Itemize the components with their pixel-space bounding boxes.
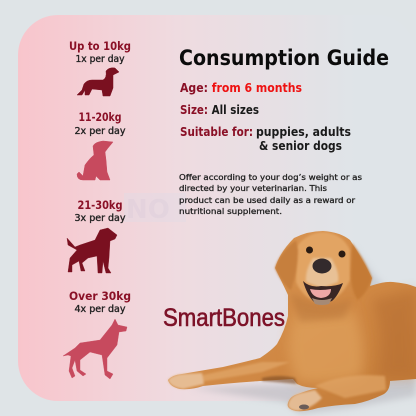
suitable for: & senior dogs — [259, 138, 342, 153]
photo: golden retriever — [168, 231, 416, 414]
dog nose — [312, 258, 332, 274]
icon: sitting dog — [77, 141, 113, 180]
dog neck shadow — [290, 292, 352, 322]
tier: 21-30kg: 21-30kg — [78, 199, 122, 212]
title: Consumption Guide — [179, 46, 389, 70]
dog front paw — [168, 373, 204, 389]
logo: SmartBones: SmartBones — [163, 304, 285, 332]
dog rear paw — [288, 390, 322, 411]
size line: Size: All sizes — [180, 102, 259, 117]
tier: up to 10kg — [69, 40, 131, 65]
tier: 11-20kg — [74, 111, 126, 137]
tier: up to 10kg: 1x per day — [76, 54, 125, 65]
tier: 21-30kg: 3x per day — [74, 213, 126, 224]
dog head — [296, 232, 350, 304]
age line: Age: from 6 months — [180, 80, 302, 95]
dog belly shadow — [262, 376, 297, 384]
dog chest light fur — [288, 308, 364, 383]
dog shadow — [190, 378, 416, 414]
description text: Offer according to your dog’s weight or as — [179, 172, 362, 182]
dog eyes — [306, 246, 313, 254]
watermark: NO — [126, 195, 170, 225]
dog claws — [299, 404, 309, 410]
tier: 11-20kg: 11-20kg — [78, 111, 122, 124]
watermark — [124, 193, 186, 225]
tier: over 30kg: 4x per day — [74, 304, 126, 315]
dog tongue — [310, 289, 331, 298]
dog flank shading — [372, 290, 416, 378]
description text — [179, 172, 362, 216]
dog ears — [275, 240, 298, 290]
description text: product can be used daily as a reward or — [179, 195, 356, 205]
dog body — [168, 231, 416, 411]
tier: 21-30kg — [74, 199, 126, 224]
tier: over 30kg — [69, 290, 131, 315]
icon: labrador — [67, 228, 117, 273]
icon: great dane — [63, 319, 127, 379]
dog leg highlight — [190, 362, 290, 382]
dog lower jaw — [312, 298, 332, 305]
panel: weight guide column — [63, 40, 131, 379]
description text: directed by your veterinarian. This — [179, 183, 327, 193]
icon: dachshund — [77, 68, 119, 96]
description text: nutritional supplement. — [179, 206, 282, 216]
dog muzzle — [306, 258, 338, 288]
tier: up to 10kg: Up to 10kg — [69, 40, 131, 53]
suitable for: puppies, adults — [256, 124, 351, 139]
tier: over 30kg: Over 30kg — [69, 290, 131, 303]
tier: 11-20kg: 2x per day — [74, 126, 126, 137]
suitable for: Suitable for: — [180, 124, 253, 139]
suitable for — [180, 124, 351, 153]
dog mouth — [303, 281, 343, 303]
